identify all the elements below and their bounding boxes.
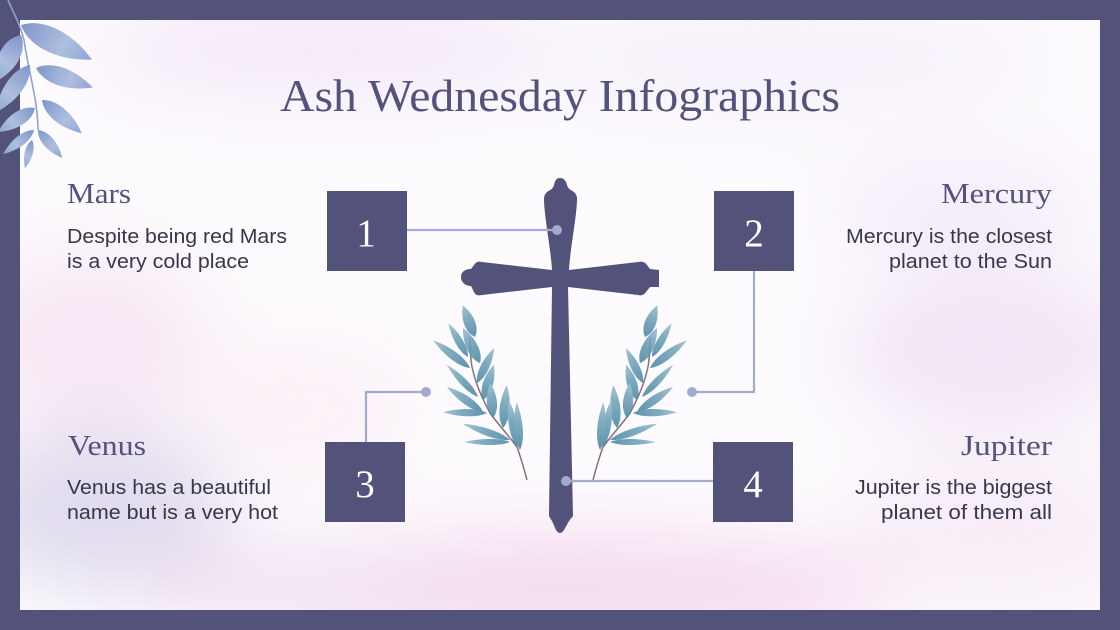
number box 4 xyxy=(713,442,793,522)
cross xyxy=(461,178,659,533)
number box 3 xyxy=(325,442,405,522)
heading: Mars: Mars xyxy=(67,179,131,210)
number box 2: 2 xyxy=(744,212,764,255)
number box 1: 1 xyxy=(356,212,376,255)
panel: Jupiter xyxy=(713,431,1053,524)
text: Venus description: Venus has a beautiful xyxy=(67,477,271,499)
connector 2 xyxy=(687,271,754,397)
title: Ash Wednesday Infographics xyxy=(280,70,840,121)
text: Mercury description: planet to the Sun xyxy=(889,251,1052,273)
text: Mars description: is a very cold place xyxy=(67,251,249,273)
heading: Mercury: Mercury xyxy=(941,179,1052,210)
panel: Mars xyxy=(67,179,407,273)
text: Jupiter description: planet of them all xyxy=(881,502,1052,524)
connector 4 xyxy=(561,476,713,486)
right olive branch xyxy=(593,303,689,480)
number box 1 xyxy=(327,191,407,271)
text: Mars description: Despite being red Mars xyxy=(67,226,287,248)
text: Mercury description: Mercury is the closest xyxy=(846,226,1052,248)
text: Venus description: name but is a very hot xyxy=(67,502,278,524)
connector 1 xyxy=(407,225,562,235)
connector 3 xyxy=(366,387,431,442)
corner leaf sprig xyxy=(0,0,97,169)
heading: Venus: Venus xyxy=(68,431,146,462)
heading: Jupiter: Jupiter xyxy=(961,431,1053,462)
panel: Venus xyxy=(67,431,405,524)
number box 4: 4 xyxy=(743,463,763,506)
text: Jupiter description: Jupiter is the biggest xyxy=(855,477,1052,499)
left olive branch xyxy=(431,303,527,480)
panel: Mercury xyxy=(714,179,1052,273)
number box 2 xyxy=(714,191,794,271)
number box 3: 3 xyxy=(355,463,375,506)
